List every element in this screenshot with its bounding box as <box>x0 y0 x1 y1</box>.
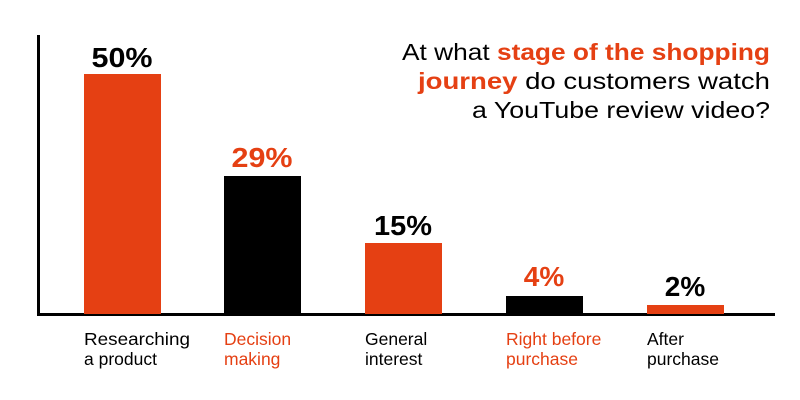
bar: researching a product: Researching <box>84 329 190 349</box>
bar: after purchase <box>647 271 724 369</box>
bar: decision making: making <box>224 349 280 369</box>
bar: general interest: interest <box>365 349 423 369</box>
bar: researching a product <box>84 42 190 369</box>
title: journey do customers watch <box>417 68 770 94</box>
title: a YouTube review video? <box>472 97 770 123</box>
bar: right before purchase <box>506 261 601 369</box>
bar: decision making <box>224 142 301 369</box>
bar: after purchase: 2% <box>665 271 705 302</box>
bar: researching a product: a product <box>84 349 157 369</box>
bar: right before purchase: 4% <box>524 261 564 292</box>
bar: general interest: 15% <box>374 210 432 241</box>
title <box>402 39 770 123</box>
axes <box>37 35 775 316</box>
bar: right before purchase: Right before <box>506 329 601 349</box>
bar: decision making: 29% <box>232 142 293 173</box>
bar: after purchase: After <box>647 329 684 349</box>
bar: after purchase: purchase <box>647 349 719 369</box>
bar: general interest: General <box>365 329 427 349</box>
bar: general interest <box>365 210 442 369</box>
title: At what stage of the shopping <box>402 39 770 65</box>
bar: decision making: Decision <box>224 329 291 349</box>
bar: right before purchase: purchase <box>506 349 578 369</box>
bar: researching a product: 50% <box>92 42 153 73</box>
